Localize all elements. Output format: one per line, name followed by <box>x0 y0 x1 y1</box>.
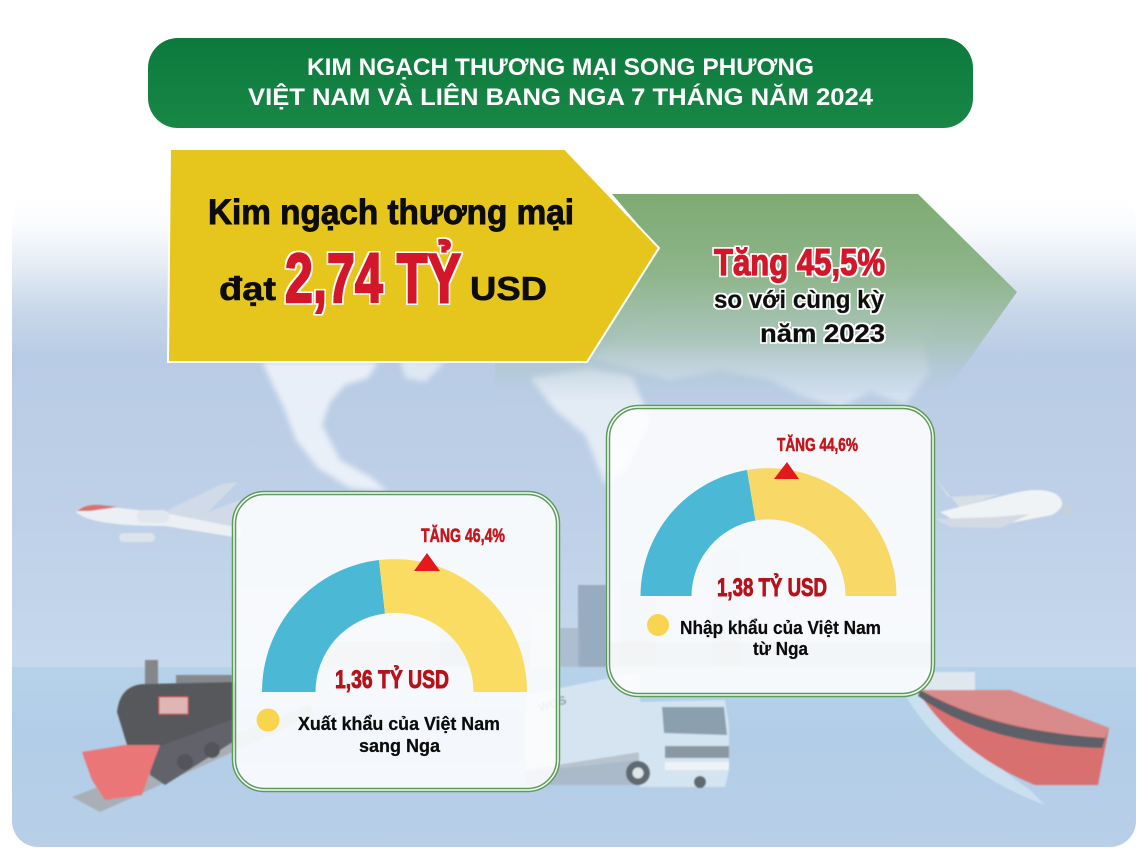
title banner: KIM NGẠCH THƯƠNG MẠI SONG PHƯƠNG <box>307 54 814 81</box>
legend text <box>680 618 881 659</box>
value label: 1,38 TỶ USD <box>717 572 827 602</box>
total heading: Kim ngạch thương mại <box>208 193 574 232</box>
icon: up triangle <box>414 553 440 571</box>
value label: 1,36 TỶ USD <box>335 664 449 694</box>
growth percentage: Tăng 45,5% <box>714 242 885 283</box>
comparison text: so với cùng kỳ <box>714 286 884 314</box>
title banner: VIỆT NAM VÀ LIÊN BANG NGA 7 THÁNG NĂM 2024 <box>248 83 874 111</box>
legend text: Nhập khẩu của Việt Nam <box>680 618 881 638</box>
truck <box>548 678 730 789</box>
yellow arrow: total trade: đạt <box>219 270 276 307</box>
world map <box>262 355 928 491</box>
yellow arrow: total trade: USD <box>470 270 547 307</box>
city skyline <box>560 584 606 668</box>
airplane left <box>76 482 240 542</box>
legend dot <box>647 614 669 636</box>
comparison text: năm 2023 <box>760 320 885 348</box>
legend text: Xuất khẩu của Việt Nam <box>298 714 500 734</box>
growth label: TĂNG 46,4% <box>421 525 505 547</box>
train <box>72 659 237 812</box>
truck: WOS <box>537 693 568 715</box>
legend text: sang Nga <box>359 736 441 756</box>
comparison text <box>714 286 885 348</box>
gauge: imports <box>640 468 896 596</box>
panel: imports <box>606 406 934 696</box>
legend text <box>298 714 500 756</box>
icon: up triangle <box>774 462 799 479</box>
title banner <box>148 38 973 128</box>
panel: exports <box>232 492 560 792</box>
legend text: từ Nga <box>753 639 809 659</box>
total value: 2,74 TỶ <box>285 239 461 317</box>
airplane right <box>936 483 1072 528</box>
gauge: exports <box>262 559 527 692</box>
background panel <box>12 195 1136 847</box>
green arrow: growth <box>495 194 1017 402</box>
yellow arrow: total trade <box>168 149 659 362</box>
cargo ship <box>905 672 1109 805</box>
growth label: TĂNG 44,6% <box>777 434 858 455</box>
legend dot <box>256 708 280 732</box>
